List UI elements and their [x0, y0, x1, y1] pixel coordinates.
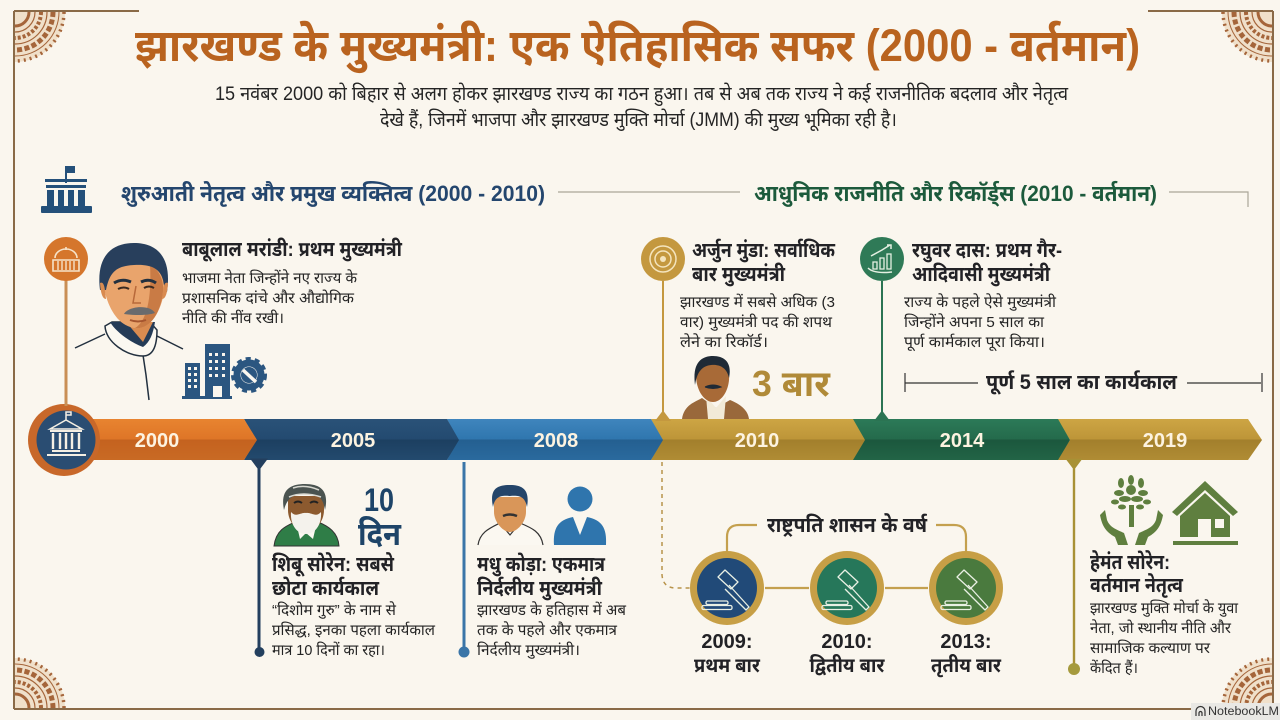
portrait: Madhu Koda: [478, 485, 543, 545]
description: केंदित हैं।: [1090, 659, 1138, 677]
description: नेता, जो स्थानीय नीति और: [1090, 619, 1232, 637]
watermark: NotebookLM: [1208, 706, 1279, 718]
icon: capitol dome badge: [44, 237, 88, 281]
description: सामाजिक कल्याण पर: [1090, 640, 1211, 657]
name heading: शिबू सोरेन: सबसे: [272, 552, 395, 577]
panel: Raghubar Das: [860, 237, 1262, 420]
description: निर्दलीय मुख्यमंत्री।: [477, 641, 580, 660]
segment 2005: [244, 419, 459, 460]
panel: Madhu Koda: [458, 462, 626, 660]
year labels: [694, 631, 1002, 678]
year labels: द्वितीय बार: [810, 653, 886, 677]
intro text: देखे हैं, जिनमें भाजपा और झारखण्ड मुक्ति मोर्चा (JMM) की मुख्य भूमिका रही है।: [380, 108, 897, 132]
name heading: [477, 552, 606, 601]
name heading: हेमंत सोरेन:: [1090, 550, 1170, 574]
year labels: 2019: [1143, 430, 1187, 452]
stat: 3 times: 3 बार: [752, 363, 831, 404]
stem: [657, 281, 669, 420]
icon: growth chart badge: [860, 237, 904, 281]
segment 2000: [90, 419, 257, 460]
end dot: [254, 647, 264, 657]
watermark: [1191, 703, 1280, 720]
heading: modern politics: आधुनिक राजनीति और रिकॉर्ड्स (2010 - वर्तमान): [754, 180, 1157, 207]
year labels: प्रथम बार: [694, 655, 761, 677]
gavel badge 2009: [690, 551, 764, 625]
heading: राष्ट्रपति शासन के वर्ष: [767, 513, 928, 537]
description: प्रसिद्ध, इनका पहला कार्यकाल: [272, 621, 436, 639]
description: झारखण्ड के हतिहास में अब: [477, 601, 626, 619]
year labels: तृतीय बार: [931, 653, 1002, 678]
stem: [253, 460, 265, 652]
icon: hands holding tree: [1100, 475, 1163, 545]
heading: early leadership: शुरुआती नेतृत्व और प्रमुख व्यक्तित्व (2000 - 2010): [121, 181, 545, 207]
description: भाजमा नेता जिन्होंने नए राज्य के: [182, 269, 357, 287]
description: [477, 601, 626, 660]
stem: [64, 280, 68, 406]
name heading: निर्दलीय मुख्यमंत्री: [477, 576, 603, 601]
segment 2014: [852, 419, 1070, 460]
icon: record badge: [641, 237, 685, 281]
stat: 10 days: [358, 482, 402, 552]
description: नीति की नींव रखी।: [182, 309, 284, 327]
gavel badge 2013: [929, 551, 1003, 625]
panel: President's rule years: [690, 513, 1003, 678]
end dot: [458, 646, 470, 658]
description: राज्य के पहले ऐसे मुख्यमंत्री: [904, 293, 1057, 312]
stat: 10 days: दिन: [358, 516, 402, 552]
dashed connector to President's rule: [662, 462, 690, 588]
icon: house: [1172, 481, 1238, 545]
intro text: [215, 82, 1068, 132]
segment 2010: [651, 419, 865, 460]
portrait: Shibu Soren: [274, 484, 339, 546]
year labels: 2008: [534, 430, 578, 452]
end dot: [1068, 663, 1080, 675]
name heading: [1090, 550, 1184, 598]
year labels: 2009:: [701, 631, 753, 653]
year labels: 2010:: [821, 631, 873, 653]
description: लेने का रिकॉर्ड।: [680, 333, 768, 351]
name heading: बाबूलाल मरांडी: प्रथम मुख्यमंत्री: [182, 237, 403, 262]
name heading: [692, 238, 836, 287]
year labels: [135, 430, 1187, 452]
description: तक के पहले और एकमात्र: [477, 621, 618, 639]
panel: Babulal Marandi: [44, 237, 403, 406]
year labels: 2013:: [940, 631, 992, 653]
stem: [462, 462, 466, 652]
portrait: Babulal Marandi: [75, 243, 183, 400]
timeline start medallion: [28, 404, 100, 476]
name heading: वर्तमान नेतृत्व: [1090, 573, 1184, 598]
panel: Hemant Soren: [1068, 460, 1239, 677]
description: प्रशासनिक दांचे और औद्योगिक: [182, 289, 354, 307]
description: [182, 269, 357, 327]
name heading: मधु कोड़ा: एकमात्र: [477, 552, 606, 577]
panel: Shibu Soren: [253, 460, 436, 659]
year labels: 2000: [135, 430, 179, 452]
stem: [876, 281, 888, 420]
name heading: [912, 238, 1062, 287]
description: वार) मुख्यमंत्री पद की शपथ: [680, 313, 832, 332]
name heading: बार मुख्यमंत्री: [692, 262, 786, 287]
description: [904, 293, 1057, 352]
bracket: full 5-year term: पूर्ण 5 साल का कार्यकाल: [986, 370, 1177, 395]
gavel badge 2010: [810, 551, 884, 625]
year labels: 2005: [331, 430, 375, 452]
portrait: Arjun Munda: [682, 356, 749, 419]
name heading: रघुवर दास: प्रथम गैर-: [912, 238, 1062, 263]
description: [680, 293, 835, 351]
timeline bar: [90, 419, 1262, 460]
description: जिन्होंने अपना 5 साल का: [904, 313, 1045, 331]
segment 2019: [1057, 419, 1262, 460]
intro text: 15 नवंबर 2000 को बिहार से अलग होकर झारखण्ड राज्य का गठन हुआ। तब से अब तक राज्य ने कई राजनीतिक बदलाव और नेतृत्व: [215, 82, 1068, 107]
stem: [1068, 460, 1080, 668]
description: मात्र 10 दिनों का रहा।: [272, 641, 385, 659]
name heading: आदिवासी मुख्यमंत्री: [912, 262, 1051, 287]
segment 2008: [447, 419, 663, 460]
year labels: 2014: [940, 430, 985, 452]
year labels: 2010: [735, 430, 779, 452]
stat: 10 days: 10: [364, 482, 394, 518]
icon: parliament building with flag: [41, 166, 92, 213]
icon: buildings and gear: [182, 344, 265, 399]
panel: Arjun Munda: [641, 237, 836, 420]
name heading: अर्जुन मुंडा: सर्वाधिक: [692, 238, 836, 263]
bracket: full 5-year term: [905, 370, 1262, 395]
description: “दिशोम गुरु” के नाम से: [272, 601, 397, 620]
description: पूर्ण कार्मकाल पूरा किया।: [904, 333, 1045, 352]
icon: person silhouette: [554, 486, 606, 545]
description: [1090, 599, 1239, 677]
title: झारखण्ड के मुख्यमंत्री: एक ऐतिहासिक सफर (2000 - वर्तमान): [135, 20, 1140, 73]
description: झारखण्ड में सबसे अधिक (3: [680, 293, 835, 311]
description: [272, 601, 436, 659]
description: झारखण्ड मुक्ति मोर्चा के युवा: [1090, 599, 1239, 618]
name heading: छोटा कार्यकाल: [272, 576, 380, 600]
name heading: [272, 552, 395, 600]
